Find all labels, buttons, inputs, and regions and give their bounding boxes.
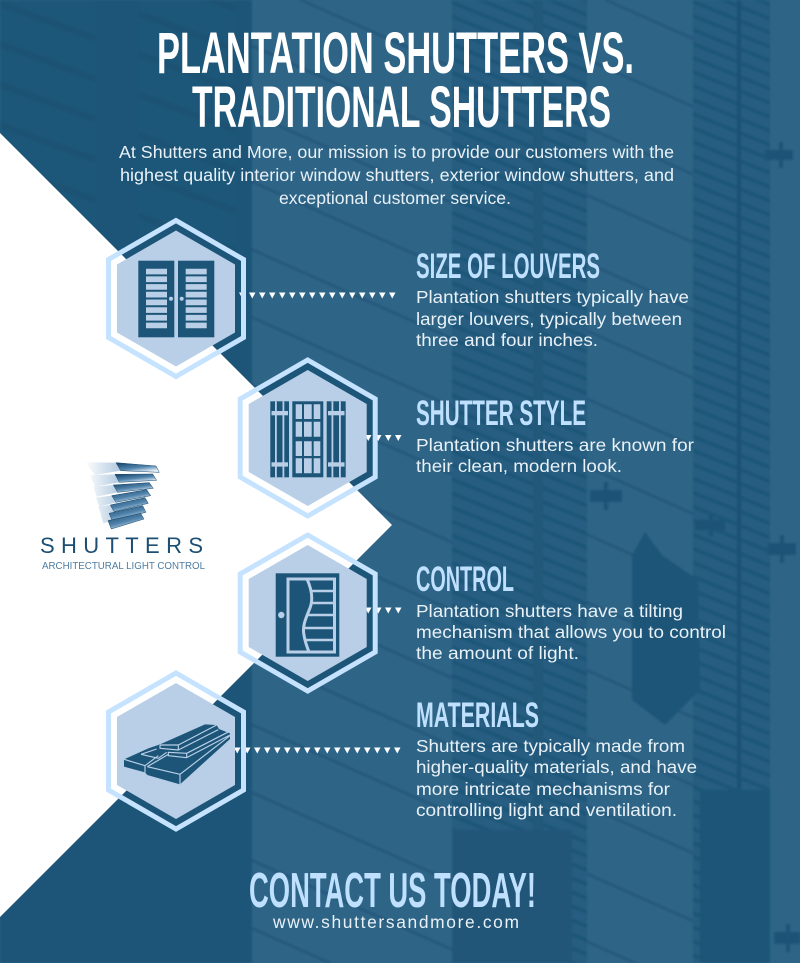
call to action: www.shuttersandmore.com bbox=[272, 912, 519, 932]
icon: double louvered shutters bbox=[108, 220, 244, 376]
section: materials: Shutters are typically made from bbox=[416, 736, 685, 756]
white diagonal panel bbox=[0, 133, 392, 917]
logo: SHUTTERS bbox=[40, 533, 203, 558]
section: shutter style: their clean, modern look. bbox=[416, 456, 622, 476]
section: materials: controlling light and ventilation. bbox=[416, 800, 677, 820]
title bbox=[157, 21, 634, 140]
section: control: CONTROL bbox=[416, 560, 514, 599]
section: size of louvers: SIZE OF LOUVERS bbox=[416, 247, 600, 286]
icon: shutters flanking window bbox=[240, 360, 375, 516]
arrow: style connector bbox=[365, 435, 402, 441]
call to action bbox=[249, 864, 536, 932]
intro paragraph bbox=[119, 142, 674, 208]
logo mark: slats bbox=[85, 462, 159, 529]
section: materials: more intricate mechanisms for bbox=[416, 779, 670, 799]
icon: door with tilting louvers bbox=[240, 535, 375, 691]
section: size of louvers bbox=[416, 247, 689, 350]
section: size of louvers: Plantation shutters typically have bbox=[416, 287, 689, 307]
section: shutter style bbox=[416, 394, 694, 476]
dark hexagon backing shapes bbox=[108, 220, 375, 829]
section: size of louvers: larger louvers, typically between bbox=[416, 309, 682, 329]
section: materials bbox=[416, 696, 697, 820]
arrow: louvers connector bbox=[239, 292, 396, 298]
section: control: Plantation shutters have a tilting bbox=[416, 601, 683, 621]
arrow: materials connector bbox=[234, 748, 400, 754]
section: control bbox=[416, 560, 726, 663]
section: shutter style: SHUTTER STYLE bbox=[416, 394, 586, 433]
intro paragraph: highest quality interior window shutters, exterior window shutters, and bbox=[120, 165, 674, 185]
intro paragraph: At Shutters and More, our mission is to provide our customers with the bbox=[119, 142, 674, 162]
logo bbox=[40, 462, 205, 572]
section: materials: higher-quality materials, and have bbox=[416, 757, 697, 777]
section: shutter style: Plantation shutters are known for bbox=[416, 435, 694, 455]
section: size of louvers: three and four inches. bbox=[416, 330, 598, 350]
intro paragraph: exceptional customer service. bbox=[279, 188, 511, 208]
logo: ARCHITECTURAL LIGHT CONTROL bbox=[42, 560, 205, 572]
icon: stacked lumber bbox=[108, 673, 244, 829]
call to action: CONTACT US TODAY! bbox=[249, 864, 536, 918]
arrow: control connector bbox=[365, 608, 402, 614]
section: control: the amount of light. bbox=[416, 643, 579, 663]
section: materials: MATERIALS bbox=[416, 696, 539, 735]
section: control: mechanism that allows you to control bbox=[416, 622, 726, 642]
